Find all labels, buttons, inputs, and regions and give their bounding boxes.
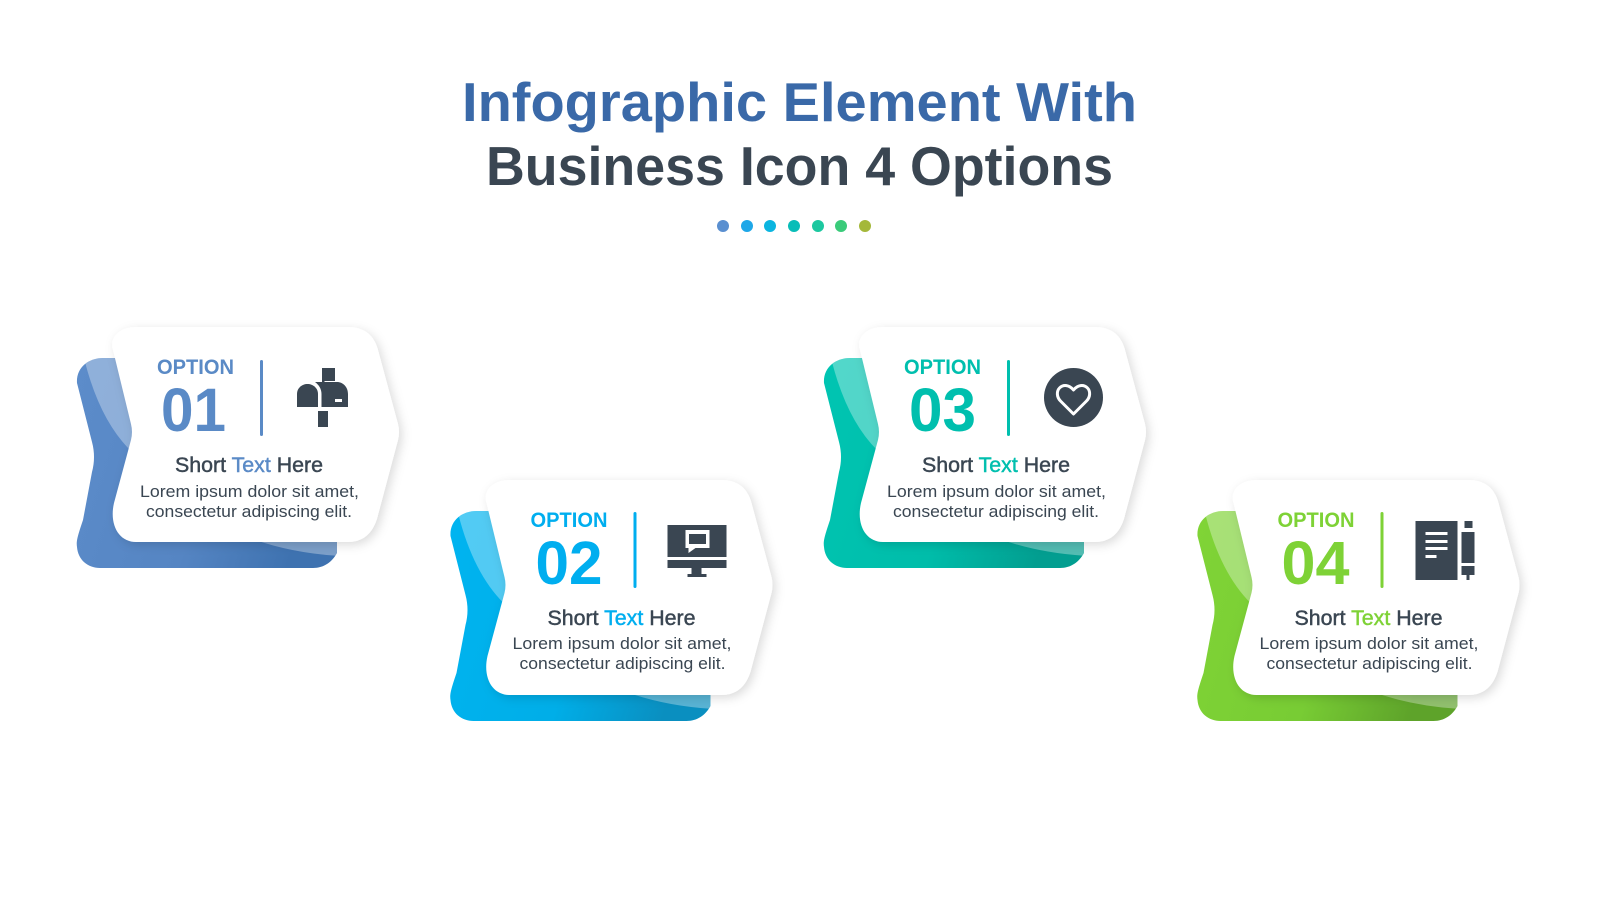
description 03: Lorem ipsum dolor sit amet, — [887, 482, 1106, 501]
back shape 01 — [77, 358, 337, 568]
highlights 04 — [1204, 498, 1466, 709]
title: Infographic Element With — [462, 71, 1137, 133]
icon: mailbox — [297, 368, 348, 427]
white card 04 — [1233, 480, 1520, 695]
divider 02 — [634, 512, 636, 588]
option label 03: OPTION — [904, 356, 981, 379]
description 01: consectetur adipiscing elit. — [146, 502, 352, 521]
white card 03 — [859, 327, 1146, 542]
icon: monitor with speech bubble — [668, 525, 726, 577]
title: Business Icon 4 Options — [486, 135, 1113, 197]
description 03 — [887, 482, 1106, 521]
description 04: Lorem ipsum dolor sit amet, — [1260, 634, 1478, 653]
option label 01: OPTION — [157, 356, 234, 379]
back shape 04 — [1197, 511, 1458, 721]
description 02: Lorem ipsum dolor sit amet, — [512, 634, 732, 653]
subheading 04: Short Text Here — [1294, 607, 1442, 630]
highlights 03 — [831, 345, 1092, 556]
white card 02 — [486, 480, 772, 695]
description 01 — [140, 482, 359, 521]
subheading 01: Short Text Here — [175, 454, 323, 477]
back shape 02 — [450, 511, 710, 721]
panel: option 04 — [1197, 480, 1520, 721]
icon: heart in circle — [1044, 368, 1103, 427]
description 02 — [512, 634, 732, 673]
divider 04 — [1380, 512, 1384, 588]
highlights 01 — [84, 345, 345, 556]
description 02: consectetur adipiscing elit. — [520, 654, 726, 673]
number 02: 02 — [536, 529, 602, 597]
dotted divider — [717, 220, 871, 232]
panel: option 02 — [450, 480, 772, 721]
subheading 03: Short Text Here — [922, 454, 1070, 477]
back shape 03 — [824, 358, 1084, 568]
description 03: consectetur adipiscing elit. — [893, 502, 1099, 521]
description 01: Lorem ipsum dolor sit amet, — [140, 482, 359, 501]
number 04: 04 — [1282, 529, 1350, 597]
divider 01 — [260, 360, 263, 436]
description 04: consectetur adipiscing elit. — [1266, 654, 1472, 673]
number 01: 01 — [161, 376, 226, 444]
divider 03 — [1007, 360, 1010, 436]
highlights 02 — [458, 498, 718, 709]
number 03: 03 — [909, 376, 976, 444]
icon: notebook and pen — [1416, 521, 1474, 580]
panel: option 03 — [824, 327, 1146, 568]
panel: option 01 — [77, 327, 399, 568]
title — [462, 71, 1137, 197]
description 04 — [1260, 634, 1478, 673]
option label 02: OPTION — [530, 509, 608, 532]
option label 04: OPTION — [1278, 509, 1354, 532]
subheading 02: Short Text Here — [548, 607, 696, 630]
white card 01 — [112, 327, 399, 542]
